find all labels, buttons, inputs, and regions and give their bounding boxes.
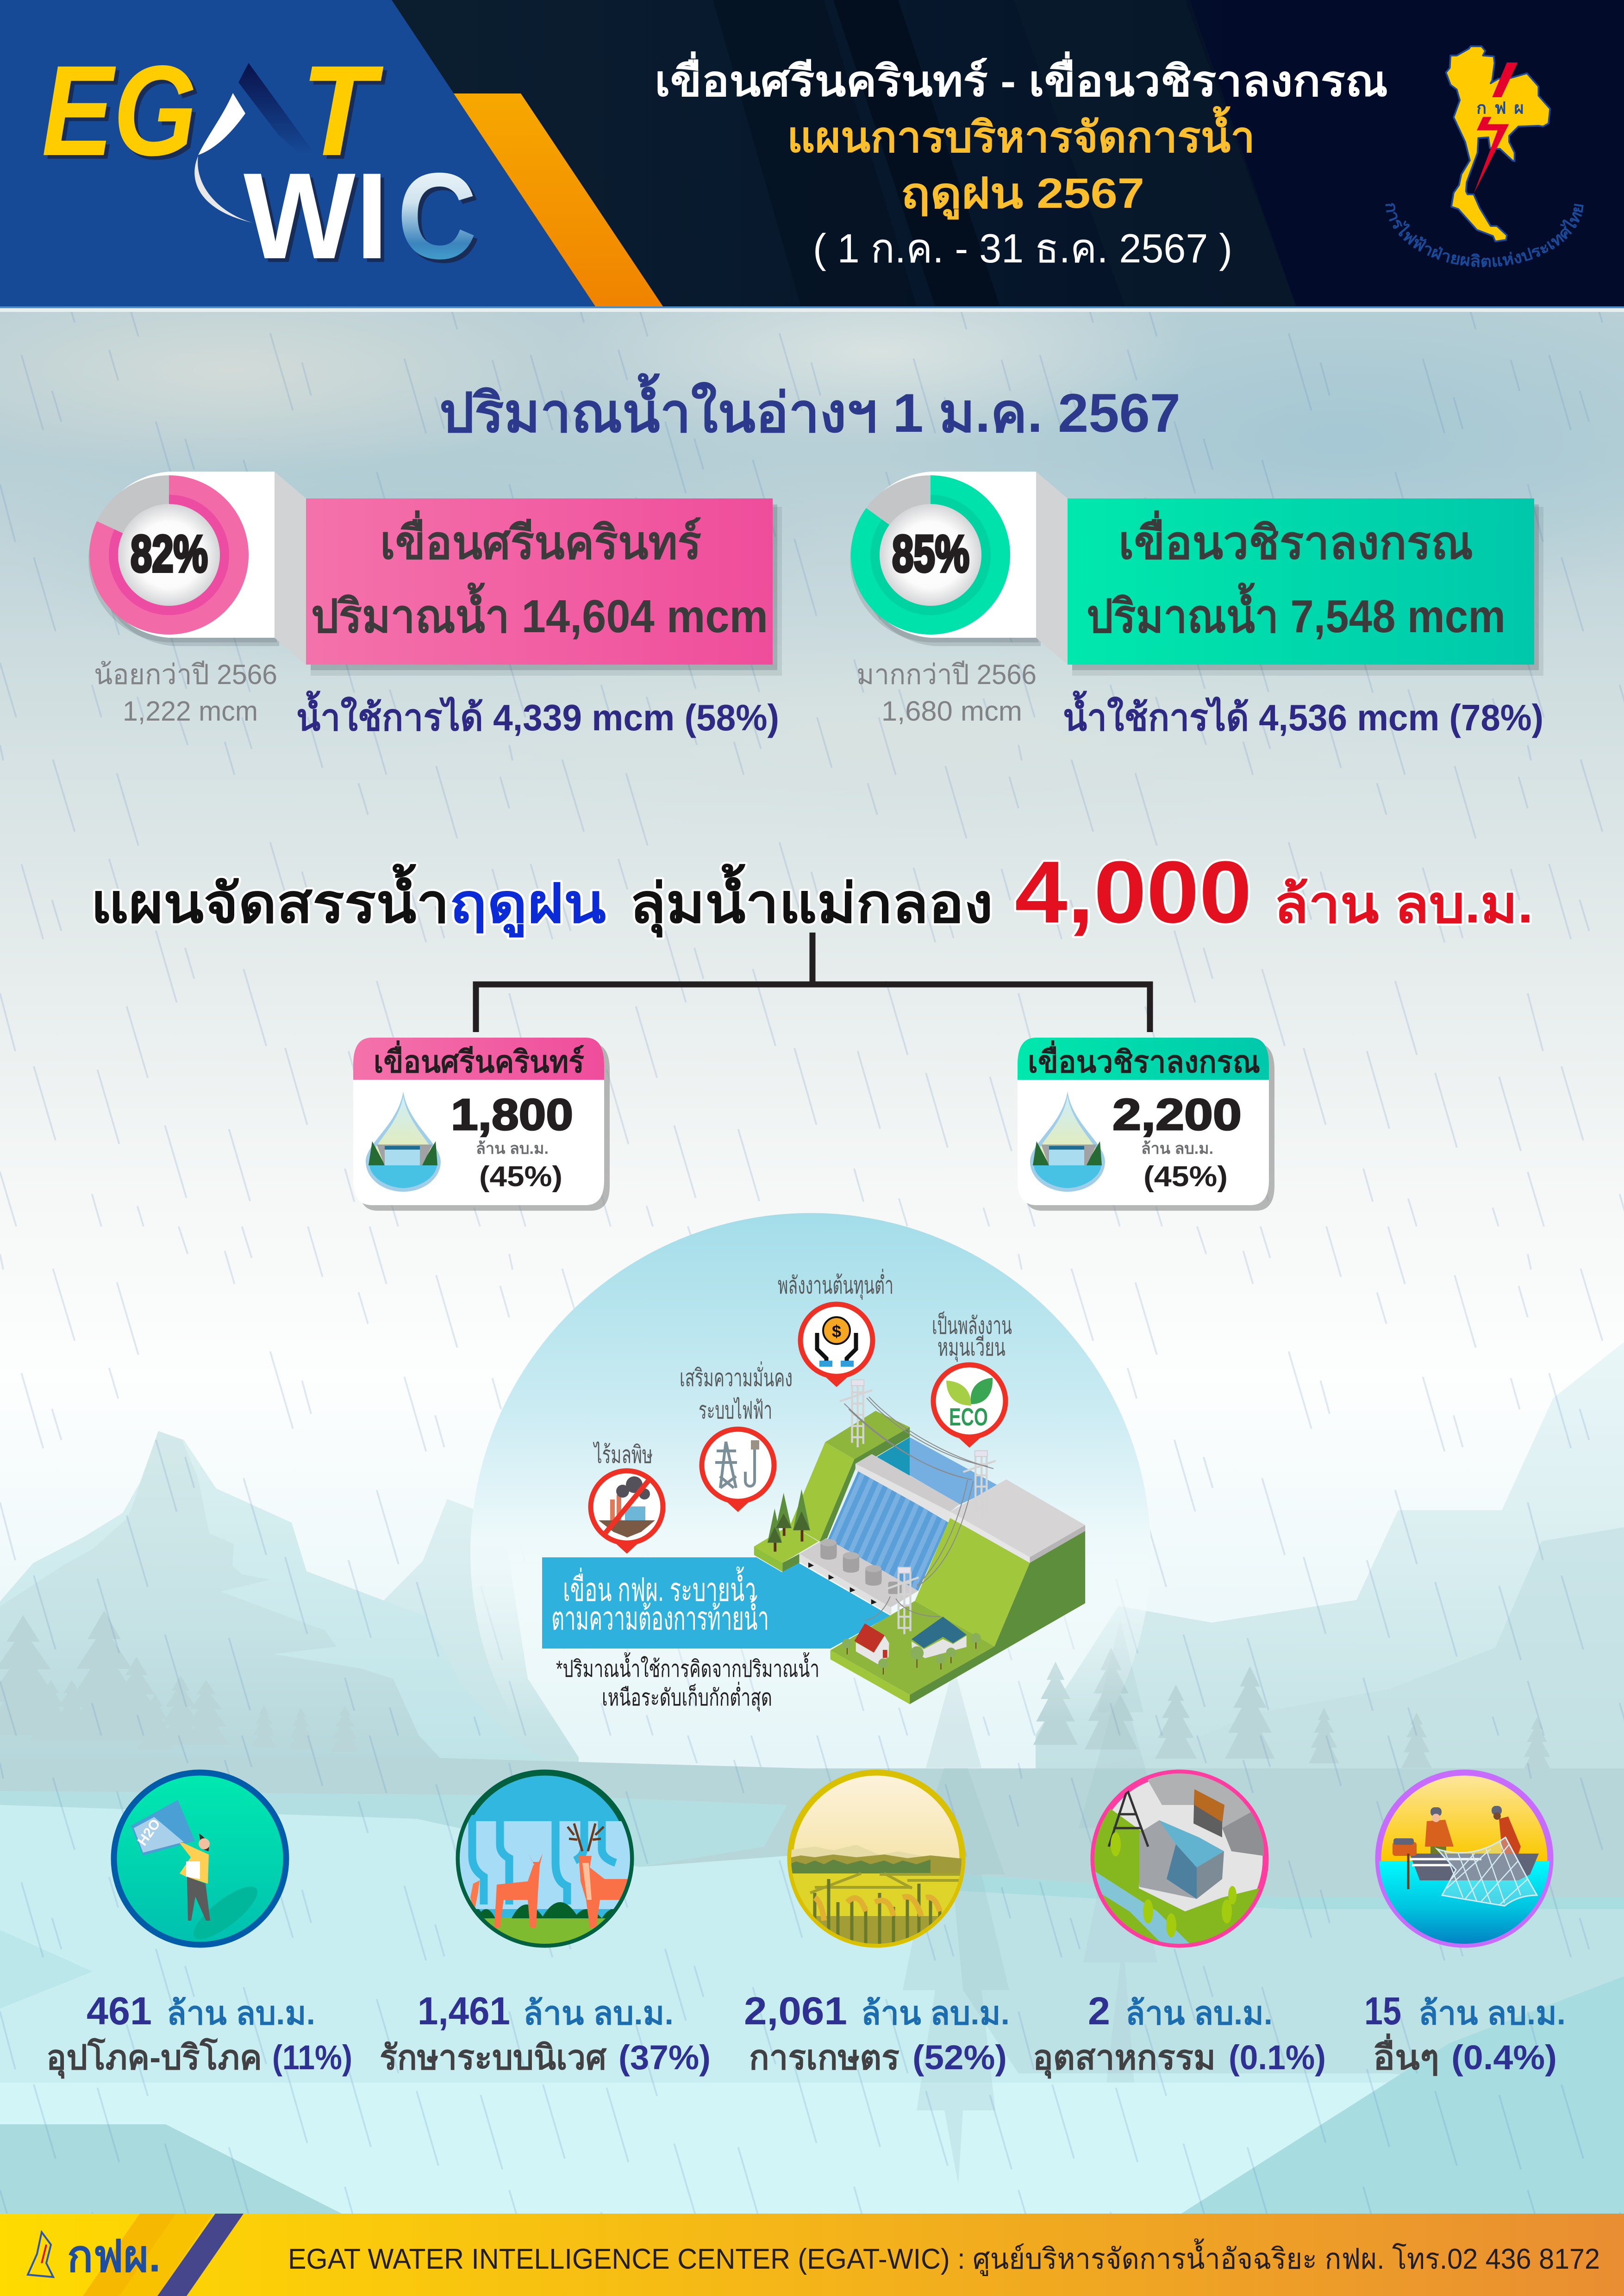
use group: agriculture [744, 1773, 1010, 2077]
EGAT WIC logo: T [301, 38, 384, 182]
pin: grid security [680, 1361, 793, 1512]
use label: การเกษตร [749, 2038, 899, 2077]
allocation heading: แผนจัดสรรน้ำ [91, 864, 450, 934]
icon: person with water sign: H2O [135, 1817, 163, 1848]
icon: rice field [750, 1773, 968, 1957]
usable water: น้ำใช้การได้ 4,339 mcm (58%) [296, 691, 779, 738]
use label: (0.1%) [1229, 2038, 1326, 2077]
section title: ปริมาณน้ำในอ่างฯ 1 ม.ค. 2567 [439, 373, 1181, 444]
blue logo panel [0, 0, 595, 306]
header titles: ฤดูฝน 2567 [901, 170, 1144, 220]
pin: renewable eco: ECO [949, 1403, 988, 1431]
value text: ล้าน ลบ.ม. [167, 1995, 315, 2031]
value text [418, 1989, 674, 2033]
value text: ล้าน ลบ.ม. [1418, 1995, 1566, 2031]
year comparison [856, 659, 1037, 727]
donut 85% [851, 475, 1010, 635]
blue release banner [542, 1557, 890, 1649]
year comparison: 1,222 mcm [123, 696, 258, 727]
pin: grid security: ระบบไฟฟ้า [699, 1397, 772, 1424]
card: Srinagarind allocation: 1,800 [451, 1090, 573, 1139]
isometric dam [754, 1380, 1085, 1704]
value text: ล้าน ลบ.ม. [523, 1995, 674, 2031]
EGAT WIC logo: T [305, 42, 388, 186]
use label: อุตสาหกรรม [1033, 2038, 1216, 2079]
icon: water drop with dam [1030, 1091, 1105, 1192]
value text: 2 [1088, 1989, 1110, 2033]
EGAT emblem: Thailand map: กฟผ [1476, 99, 1524, 118]
EGAT WIC logo: WI [244, 148, 388, 285]
year comparison: 1,680 mcm [881, 696, 1022, 727]
blue release banner: ตามความต้องการท้ายน้ำ [551, 1595, 769, 1636]
pin: renewable eco [932, 1312, 1012, 1448]
footnote [556, 1652, 819, 1711]
blue release banner: เขื่อน กฟผ. ระบายน้ำ [563, 1566, 756, 1608]
card: Srinagarind allocation [353, 1038, 610, 1211]
pin: pollution free: ไร้มลพิษ [593, 1441, 653, 1468]
donut connector [88, 472, 306, 665]
footnote: *ปริมาณน้ำใช้การคิดจากปริมาณน้ำ [556, 1652, 819, 1682]
EGAT WIC logo: EG [45, 42, 200, 186]
donut 82%: 82% [131, 525, 208, 583]
EGAT footer logo [28, 2232, 161, 2281]
year comparison: น้อยกว่าปี 2566 [94, 659, 277, 690]
pin: low cost energy [778, 1269, 893, 1387]
pink label box [306, 498, 782, 676]
value text [87, 1989, 315, 2033]
allocation heading: 4,000 [1015, 843, 1252, 941]
EGAT WIC logo: WI [247, 151, 392, 288]
teal label box [1068, 498, 1543, 676]
value text [1088, 1989, 1273, 2033]
use label: รักษาระบบนิเวศ [380, 2038, 607, 2077]
card: Vajiralongkorn allocation: เขื่อนวชิราลงกรณ [1028, 1040, 1260, 1079]
hydropower benefits illustration [470, 1213, 1151, 1893]
use group: other [1364, 1773, 1566, 2077]
card: Vajiralongkorn allocation: (45%) [1143, 1161, 1228, 1193]
header titles: เขื่อนศรีนครินทร์ - เขื่อนวชิราลงกรณ [655, 51, 1388, 105]
pink label box: ปริมาณน้ำ 14,604 mcm [311, 582, 768, 642]
header titles [655, 51, 1388, 271]
allocation heading [91, 843, 1533, 941]
footnote: เหนือระดับเก็บกักต่ำสุด [602, 1682, 772, 1711]
blue house [912, 1636, 967, 1658]
card: Srinagarind allocation: (45%) [479, 1161, 562, 1193]
EGAT WIC logo: EG [42, 38, 197, 182]
header titles: ( 1 ก.ค. - 31 ธ.ค. 2567 ) [813, 225, 1232, 271]
panel: Srinagarind storage [88, 472, 782, 738]
icon: person with water sign [114, 1773, 286, 1947]
use label: (11%) [272, 2038, 352, 2077]
value text [744, 1989, 1010, 2033]
use group: ecosystem [380, 1773, 711, 2077]
pink label box: เขื่อนศรีนครินทร์ [380, 510, 701, 569]
value text: ล้าน ลบ.ม. [861, 1995, 1010, 2031]
EGAT footer logo: กฟผ. [67, 2232, 161, 2281]
pin: renewable eco: เป็นพลังงาน [932, 1312, 1012, 1339]
icon: deer in forest [454, 1773, 639, 1954]
EGAT emblem: Thailand map: การไฟฟ้าฝ่ายผลิตแห่งประเทศไทย [1382, 201, 1587, 271]
value text: 1,461 [418, 1989, 510, 2033]
EGAT WIC logo [42, 38, 481, 288]
allocation heading: ล้าน ลบ.ม. [1274, 876, 1533, 933]
trees [775, 1527, 802, 1552]
footer contact line: EGAT WATER INTELLIGENCE CENTER (EGAT-WIC) : ศูนย์บริหารจัดการน้ำอัจฉริยะ กฟผ. โทร.02 436 8172 [288, 2238, 1600, 2276]
pylons [840, 1383, 996, 1634]
value text [1364, 1989, 1566, 2033]
icon: fishermen with net [1375, 1773, 1555, 1954]
connector tree lines [476, 933, 1150, 1032]
use group: consumption [46, 1773, 352, 2079]
red house [856, 1636, 889, 1664]
allocation heading: ฤดูฝน [450, 873, 606, 938]
card: Vajiralongkorn allocation: ล้าน ลบ.ม. [1141, 1140, 1213, 1157]
header titles: แผนการบริหารจัดการน้ำ [787, 106, 1255, 161]
icon: factory buildings [1093, 1773, 1278, 1958]
use label: อุปโภค-บริโภค [46, 2037, 262, 2079]
use label [1373, 2033, 1557, 2077]
use label: (52%) [912, 2038, 1007, 2077]
allocation heading: ลุ่มน้ำแม่กลอง [630, 864, 993, 938]
value text: ล้าน ลบ.ม. [1125, 1995, 1273, 2031]
card: Srinagarind allocation: ล้าน ลบ.ม. [476, 1140, 549, 1157]
teal label box: เขื่อนวชิราลงกรณ [1118, 510, 1473, 569]
value text: 461 [87, 1989, 152, 2033]
use label: อื่นๆ [1373, 2033, 1439, 2077]
pale blue halo circle [470, 1213, 1151, 1893]
use label [1033, 2038, 1326, 2079]
use label [46, 2037, 352, 2079]
icon: water drop with dam [366, 1091, 441, 1192]
footer band [0, 2214, 1624, 2296]
year comparison [94, 659, 277, 727]
EGAT emblem: Thailand map [1382, 46, 1587, 271]
value text: 2,061 [744, 1989, 847, 2033]
use label: (0.4%) [1451, 2038, 1557, 2077]
pin: grid security: เสริมความมั่นคง [680, 1361, 793, 1392]
teal label box: ปริมาณน้ำ 7,548 mcm [1087, 582, 1505, 642]
donut connector [850, 472, 1068, 665]
use label: (37%) [618, 2038, 711, 2077]
donut 85%: 85% [892, 525, 969, 583]
EGAT WIC logo: C [397, 148, 477, 285]
EGAT WIC logo: C [401, 151, 481, 288]
donut 82% [89, 475, 249, 635]
panel: Vajiralongkorn storage [850, 472, 1543, 738]
use group: industry [1033, 1773, 1326, 2079]
use label [749, 2038, 1007, 2077]
header band [0, 0, 1624, 312]
pin: low cost energy: พลังงานต้นทุนต่ำ [778, 1269, 893, 1300]
pin: pollution free [591, 1441, 663, 1554]
pin: renewable eco: หมุนเวียน [937, 1334, 1006, 1362]
year comparison: มากกว่าปี 2566 [856, 659, 1037, 690]
pin: low cost energy: $ [832, 1322, 841, 1341]
card: Vajiralongkorn allocation: 2,200 [1112, 1090, 1242, 1139]
value text: 15 [1364, 1989, 1401, 2033]
card: Vajiralongkorn allocation [1018, 1038, 1274, 1211]
usable water: น้ำใช้การได้ 4,536 mcm (78%) [1063, 691, 1543, 738]
card: Srinagarind allocation: เขื่อนศรีนครินทร์ [374, 1040, 584, 1079]
